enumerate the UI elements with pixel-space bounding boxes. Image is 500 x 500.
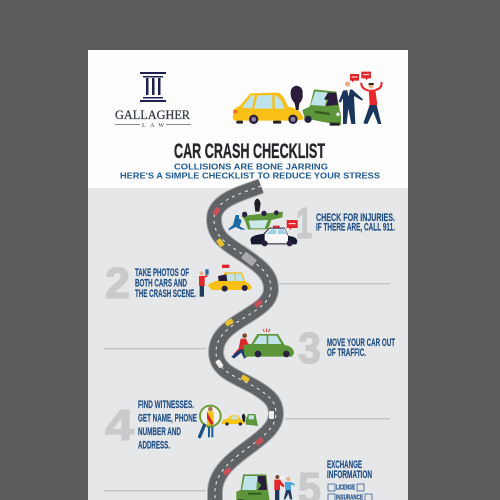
yellow car with damage (208, 272, 251, 292)
icon: pillar (140, 72, 166, 102)
panel: header (88, 50, 408, 188)
step 3 text: OF TRAFFIC. (327, 347, 366, 359)
step 4 illustration (200, 406, 258, 437)
step 5 text: EXCHANGE (327, 459, 362, 471)
overturned car (241, 210, 283, 229)
subtitle: HERE'S A SIMPLE CHECKLIST TO REDUCE YOUR STRESS (120, 170, 380, 180)
speech bubbles (350, 72, 371, 83)
green car front view (236, 474, 270, 500)
witness under magnifier (200, 406, 221, 437)
step 4 text: GET NAME, PHONE (138, 412, 197, 424)
logo: Gallagher Law (115, 72, 191, 129)
step 2 text (135, 267, 196, 300)
green car (243, 334, 294, 357)
step 3 text (327, 337, 395, 359)
smoke (254, 198, 261, 212)
logo subline: LAW (142, 123, 164, 129)
step 2 number: 2 (105, 259, 130, 308)
red alert marks (263, 328, 270, 332)
step 2 text: THE CRASH SCENE. (135, 288, 196, 300)
blue person (280, 476, 295, 499)
tag (222, 265, 229, 268)
pushing person (231, 333, 251, 359)
step 1 number: 1 (296, 199, 312, 248)
step 4 text: FIND WITNESSES. (138, 399, 194, 411)
red person (274, 475, 285, 500)
panel: checklist background (88, 188, 408, 500)
connector lines (104, 283, 390, 492)
step 2 text: BOTH CARS AND (135, 278, 187, 290)
step 3 number: 3 (298, 324, 321, 373)
step 5 illustration (236, 474, 295, 500)
logo wordmark: GALLAGHER (115, 107, 190, 122)
yellow car (233, 93, 304, 124)
step 2 illustration (199, 265, 251, 297)
step 4 text: NUMBER AND (138, 426, 181, 438)
step 1 text: CHECK FOR INJURIES. (316, 212, 395, 224)
title: CAR CRASH CHECKLIST (174, 140, 325, 163)
green car (302, 89, 341, 126)
photographer (199, 269, 209, 297)
smoke (291, 86, 303, 110)
illustration: header crash scene (233, 72, 382, 126)
speech bubble (287, 220, 298, 230)
step 4 number: 4 (105, 401, 135, 450)
man in navy suit (339, 81, 363, 124)
winding road (214, 186, 276, 500)
step 1 illustration (228, 198, 298, 246)
subtitle (120, 162, 380, 180)
step 5 text: INFORMATION (327, 469, 372, 481)
road cars (212, 207, 274, 476)
exchange checklist (328, 484, 372, 500)
step 2 text: TAKE PHOTOS OF (135, 267, 189, 279)
rescuer (228, 215, 246, 230)
step 1 text: IF THERE ARE, CALL 911. (316, 222, 395, 234)
step 4 text: ADDRESS. (138, 440, 170, 452)
step 5 text (327, 459, 372, 481)
police car (250, 226, 297, 246)
small crash scene (222, 414, 258, 426)
exchange checklist: LICENSE (336, 484, 355, 492)
step 3 text: MOVE YOUR CAR OUT (327, 337, 395, 349)
man in red (361, 82, 382, 124)
step 3 illustration (231, 328, 294, 359)
subtitle: COLLISIONS ARE BONE JARRING (174, 162, 328, 172)
step 4 text (138, 399, 197, 452)
step 1 text (316, 212, 395, 234)
